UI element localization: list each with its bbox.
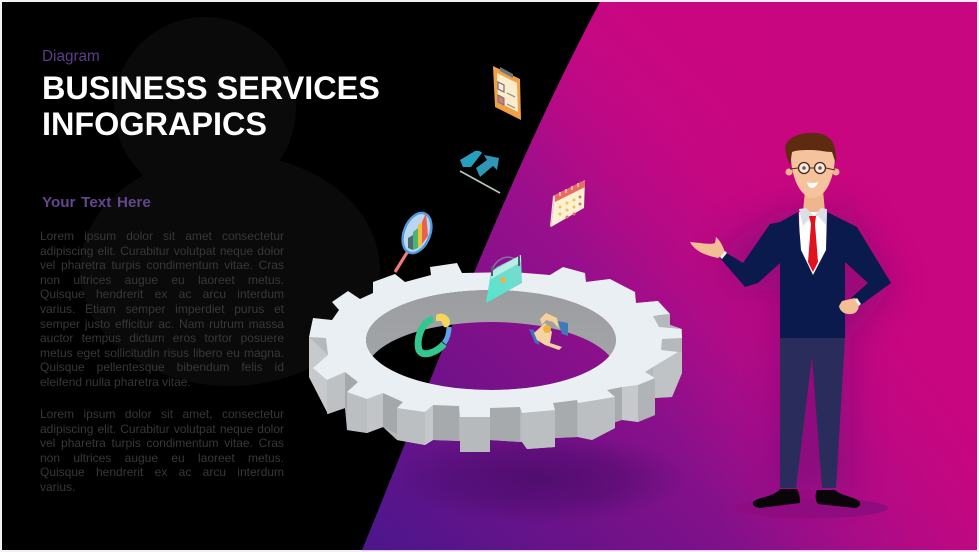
paragraph two: vel pharetra turpis condimentum vitae. Cras: [40, 436, 284, 450]
gear: [309, 263, 682, 452]
paragraph one: Quisque hendrerit ex ac arcu interdum: [40, 287, 284, 301]
person shadow: [720, 210, 895, 490]
gear side walls: [309, 279, 682, 452]
floor shadow: [734, 498, 888, 518]
trousers: [780, 337, 845, 488]
shirt cuffs: [720, 251, 861, 306]
left hand: [690, 237, 725, 258]
paragraph two: non ultrices augue eu laoreet metus.: [40, 451, 284, 465]
subheading: Your Text Here: [42, 194, 151, 211]
paragraph one: eleifend nulla pharetra vitae.: [40, 375, 191, 389]
magenta panel: [362, 2, 977, 550]
face: [791, 147, 835, 198]
hair: [785, 133, 836, 166]
title: INFOGRAPICS: [42, 106, 267, 142]
icon: briefcase: [486, 255, 522, 303]
icon: handshake: [529, 313, 568, 350]
icon: clipboard: [493, 66, 521, 120]
paragraph one: metus eget sollicitudin risus libero eu magna.: [40, 346, 284, 360]
gear shadow: [390, 432, 690, 524]
tie: [808, 216, 818, 272]
paragraph one: Quisque pellentesque bibendum felis id: [40, 360, 284, 374]
paragraph one: non ultrices augue eu laoreet metus.: [40, 273, 284, 287]
paragraph two: Lorem ipsum dolor sit amet, consectetur: [40, 407, 284, 421]
title: BUSINESS SERVICES: [42, 70, 380, 106]
icon: donut chart: [418, 314, 450, 354]
gear top face: [309, 263, 682, 417]
gear inner wall: [366, 290, 616, 356]
paragraph two: [40, 407, 284, 494]
paragraph one: varius. Etiam semper imperdiet purus et: [40, 302, 284, 316]
neck and shirt: [803, 190, 825, 212]
icon: calendar: [550, 180, 585, 227]
right hand: [839, 298, 859, 314]
paragraph one: Lorem ipsum dolor sit amet consectetur: [40, 229, 284, 243]
paragraph two: varius.: [40, 480, 75, 494]
person: [690, 133, 895, 518]
jacket: [720, 212, 891, 338]
paragraph one: auctor tempus dictum eros tortor posuere: [40, 331, 284, 345]
paragraph two: adipiscing elit. Curabitur volutpat neque dolor: [40, 422, 284, 436]
label: Diagram: Diagram: [42, 48, 100, 65]
paragraph two: Quisque hendrerit ex ac arcu interdum: [40, 465, 284, 479]
ghost silhouette: [80, 17, 380, 386]
shoes: [753, 489, 860, 508]
edge: [362, 550, 977, 551]
mouth: [807, 182, 818, 188]
paragraph one: vel pharetra turpis condimentum vitae. Cras: [40, 258, 284, 272]
icon: magnifier chart: [395, 209, 437, 272]
paragraph one: adipiscing elit. Curabitur volutpat neque dolor: [40, 244, 284, 258]
paragraph one: semper justo efficitur ac. Nam rutrum massa: [40, 317, 284, 331]
title: [42, 70, 380, 142]
paragraph one: [40, 229, 284, 389]
glasses: [798, 162, 826, 174]
icon: arrows: [460, 151, 500, 193]
